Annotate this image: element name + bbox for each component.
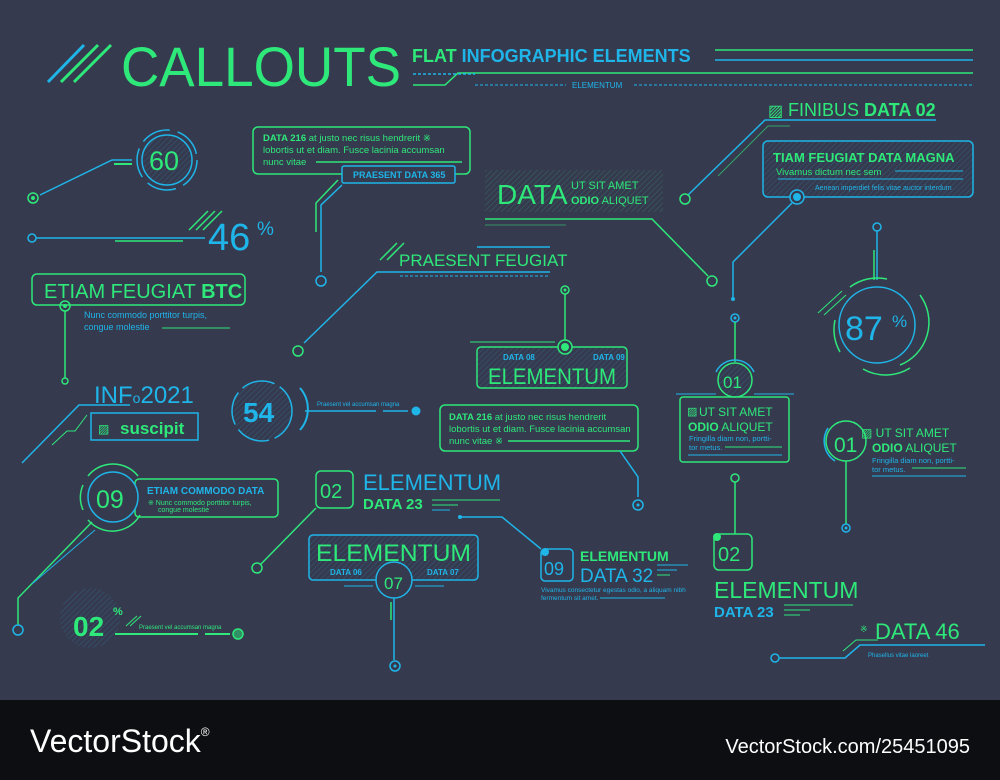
callout: 09 ETIAM COMMODO DATA <box>13 464 278 635</box>
callout: 01 UT SIT AMET right: 01 <box>834 434 857 457</box>
callout: DATA UT SIT AMET: DATA <box>497 179 568 210</box>
callout: DATA 46: DATA 46 <box>875 619 960 644</box>
callout: 01 UT SIT AMET right: Fringilla diam non, portti- <box>872 456 955 465</box>
callout: ETIAM FEUGIAT BTC: ETIAM FEUGIAT BTC <box>44 281 242 303</box>
callout: ETIAM FEUGIAT BTC: Nunc commodo porttitor turpis, <box>84 310 207 320</box>
footer bar: VectorStock.com/25451095 <box>725 736 970 758</box>
callout: 09 ELEMENTUM DATA 32: DATA 32 <box>580 566 653 587</box>
callout: DATA UT SIT AMET: ODIO ALIQUET <box>571 195 649 207</box>
callout: TIAM FEUGIAT DATA MAGNA <box>731 141 973 301</box>
callout: 09 ETIAM COMMODO DATA: 09 <box>96 486 124 514</box>
callout: 01 UT SIT AMET center: tor metus. <box>689 443 722 452</box>
callout: 54 <box>232 381 420 441</box>
callout: FINIBUS DATA 02 <box>680 100 936 204</box>
callout: PRAESENT FEUGIAT <box>293 243 567 356</box>
callout: 01 UT SIT AMET center: 01 <box>723 373 742 392</box>
callout: ETIAM FEUGIAT BTC <box>32 274 245 384</box>
callout: 54: Praesent vel accumsan magna <box>317 402 400 408</box>
callout: ELEMENTUM DATA 08/09 <box>470 286 627 389</box>
callout: 09 ETIAM COMMODO DATA: congue molestie <box>158 507 209 514</box>
title: FLAT INFOGRAPHIC ELEMENTS <box>412 46 691 66</box>
callout: TIAM FEUGIAT DATA MAGNA: Aenean imperdiet felis vitae auctor interdum <box>815 185 952 192</box>
callout: DATA 216 top: PRAESENT DATA 365 <box>353 170 445 180</box>
callout: DATA UT SIT AMET <box>485 170 717 286</box>
callout: 02 ELEMENTUM DATA 23: ELEMENTUM <box>363 470 501 495</box>
callout: 09 ELEMENTUM DATA 32: Vivamus consectetur egestas odio, a aliquam nibh <box>541 587 686 594</box>
callout: 02 ELEMENTUM DATA 23: DATA 23 <box>363 496 423 513</box>
callout: 02 ELEMENTUM DATA 23 right: ELEMENTUM <box>714 577 858 603</box>
callout: ELEMENTUM 07 <box>309 535 478 671</box>
callout: 09 ELEMENTUM DATA 32: ELEMENTUM <box>580 548 669 564</box>
callout: INFO2021 suscipit: ▨ <box>98 422 109 436</box>
callout: 87%: % <box>892 312 907 331</box>
callout: DATA 216 top: nunc vitae <box>263 157 306 168</box>
callout: INFO2021 suscipit: suscipit <box>120 419 185 438</box>
callout: ELEMENTUM 07: ELEMENTUM <box>316 540 471 567</box>
callout: DATA 216 lower: lobortis ut et diam. Fusce lacinia accumsan <box>449 424 631 435</box>
callout: 87% <box>818 223 929 375</box>
callout: 09 ETIAM COMMODO DATA: ETIAM COMMODO DATA <box>147 486 264 497</box>
callout: DATA 46: Phasellus vitae laoreet <box>868 653 929 659</box>
callout: ELEMENTUM DATA 08/09: DATA 08 <box>503 353 535 362</box>
callout: 46%: % <box>257 219 274 240</box>
callout: DATA 216 lower: nunc vitae ※ <box>449 436 503 447</box>
callout: 46%: 46 <box>208 217 250 259</box>
title: CALLOUTS <box>121 35 401 98</box>
callout: 01 UT SIT AMET right: ▨ UT SIT AMET <box>861 426 950 440</box>
callout: 02 ELEMENTUM DATA 23 right: DATA 23 <box>714 604 774 621</box>
callout: DATA 46: ※ <box>860 624 868 634</box>
callout: 01 UT SIT AMET right: tor metus. <box>872 465 905 474</box>
callout: 02 ELEMENTUM DATA 23 right <box>713 474 858 621</box>
title <box>48 35 973 98</box>
footer bar: ® <box>201 725 210 739</box>
title: ELEMENTUM <box>572 81 623 90</box>
callout: ELEMENTUM DATA 08/09: ELEMENTUM <box>488 364 616 389</box>
callout: 09 ELEMENTUM DATA 32 <box>458 515 688 602</box>
callout: DATA 216 top: lobortis ut et diam. Fusce lacinia accumsan <box>263 145 445 156</box>
callout: 09 ETIAM COMMODO DATA: ※ Nunc commodo porttitor turpis, <box>148 500 252 507</box>
footer bar <box>0 700 1000 780</box>
callout: INFO2021 suscipit: INFo2021 <box>94 382 194 409</box>
callout: INFO2021 suscipit <box>22 382 198 463</box>
callout: DATA 46 <box>771 619 985 662</box>
callout: 01 UT SIT AMET right <box>824 421 966 532</box>
callout: 60 <box>28 130 197 203</box>
callout: DATA 216 top <box>253 127 470 286</box>
callout: 87%: 87 <box>845 310 883 348</box>
callout: TIAM FEUGIAT DATA MAGNA: TIAM FEUGIAT DATA MAGNA <box>773 150 955 165</box>
callout: ELEMENTUM 07: DATA 07 <box>427 568 459 577</box>
callout: ETIAM FEUGIAT BTC: congue molestie <box>84 322 150 332</box>
callout: DATA UT SIT AMET: UT SIT AMET <box>571 180 639 192</box>
callout: 46% <box>28 211 274 259</box>
callout: 01 UT SIT AMET right: ODIO ALIQUET <box>872 441 957 455</box>
callout: 02 ELEMENTUM DATA 23: 02 <box>320 481 342 503</box>
callout: 09 ELEMENTUM DATA 32: 09 <box>544 559 564 579</box>
callout: ELEMENTUM 07: DATA 06 <box>330 568 362 577</box>
callout: 01 UT SIT AMET center: ODIO ALIQUET <box>688 420 773 434</box>
callout: 02%: Praesent vel accumsan magna <box>139 625 222 631</box>
callout: 02%: 02 <box>73 611 104 642</box>
callout: FINIBUS DATA 02: ▨ <box>768 103 783 120</box>
callout: 01 UT SIT AMET center: ▨ <box>687 406 697 418</box>
callout: TIAM FEUGIAT DATA MAGNA: Vivamus dictum nec sem <box>776 167 882 178</box>
callout: ELEMENTUM DATA 08/09: DATA 09 <box>593 353 625 362</box>
callout: 01 UT SIT AMET center: Fringilla diam non, portti- <box>689 434 772 443</box>
callout: DATA 216 lower: DATA 216 at justo nec risus hendrerit <box>449 412 607 423</box>
callout: PRAESENT FEUGIAT: PRAESENT FEUGIAT <box>399 251 567 270</box>
callout: 02 ELEMENTUM DATA 23 <box>252 470 501 573</box>
callout: 60: 60 <box>149 146 179 176</box>
callout: DATA 216 top: DATA 216 at justo nec risus hendrerit ※ <box>263 133 431 144</box>
callout: DATA 216 lower <box>440 405 643 510</box>
callout: 01 UT SIT AMET center: UT SIT AMET <box>699 405 773 419</box>
callout: FINIBUS DATA 02: FINIBUS DATA 02 <box>788 100 936 120</box>
callout: 54: 54 <box>243 397 275 428</box>
footer bar: VectorStock <box>30 723 201 759</box>
callout: 09 ELEMENTUM DATA 32: fermentum sit amet. <box>541 595 599 602</box>
callout: 01 UT SIT AMET center <box>676 314 794 462</box>
callout: ELEMENTUM 07: 07 <box>384 574 403 593</box>
callout: 02%: % <box>113 606 123 618</box>
callout: 02% <box>60 588 243 648</box>
callout: 02 ELEMENTUM DATA 23 right: 02 <box>718 544 740 566</box>
